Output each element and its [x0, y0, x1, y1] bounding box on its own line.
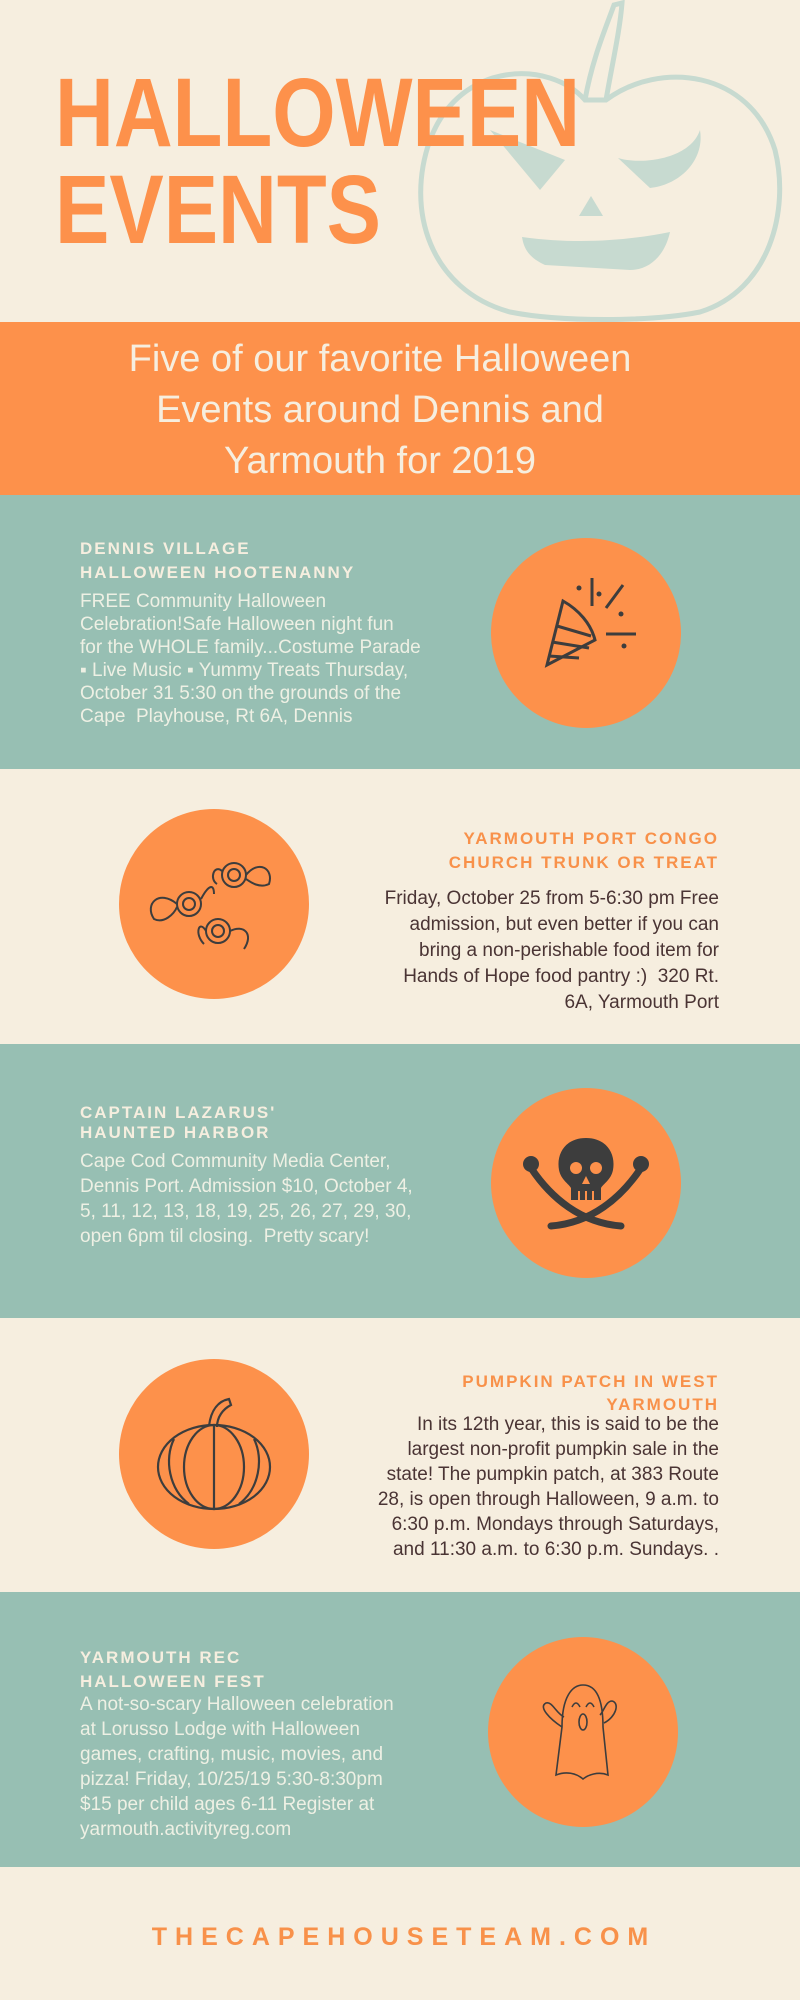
heading: Dennis Village: HALLOWEEN HOOTENANNY — [80, 563, 355, 582]
text: event 4: and 11:30 a.m. to 6:30 p.m. Sundays. . — [393, 1539, 719, 1560]
text: event 3: 5, 11, 12, 13, 18, 19, 25, 26, 27, 29, 30, — [80, 1201, 411, 1222]
icon: ghost — [488, 1637, 678, 1827]
panel: event 3 — [0, 1044, 800, 1318]
text: event 1: FREE Community Halloween — [80, 591, 326, 612]
heading: Pumpkin Patch: PUMPKIN PATCH IN WEST — [462, 1372, 719, 1391]
text: event 4 — [378, 1414, 719, 1560]
text: event 2: Friday, October 25 from 5-6:30 pm Free — [385, 888, 719, 909]
text: event 2: admission, but even better if you can — [410, 914, 719, 935]
text: event 3: open 6pm til closing. Pretty scary! — [80, 1226, 369, 1247]
panel: event 1 — [0, 495, 800, 769]
icon: skull and swords — [491, 1088, 681, 1278]
title — [55, 58, 580, 264]
text: event 4: 6:30 p.m. Mondays through Saturdays, — [392, 1514, 719, 1535]
panel: event 4 — [0, 1318, 800, 1592]
text: event 3: Dennis Port. Admission $10, October 4, — [80, 1176, 413, 1197]
text: event 4: 28, is open through Halloween, 9 a.m. to — [378, 1489, 719, 1510]
banner text: Events around Dennis and — [156, 389, 604, 431]
text: event 4: largest non-profit pumpkin sale in the — [407, 1439, 719, 1460]
orange banner — [0, 322, 800, 495]
heading: Yarmouth Rec — [80, 1648, 266, 1691]
text: event 3: Cape Cod Community Media Center, — [80, 1151, 390, 1172]
heading: Yarmouth Port Congo: CHURCH TRUNK OR TREAT — [449, 853, 719, 872]
text: event 5: $15 per child ages 6-11 Register at — [80, 1794, 374, 1815]
text: event 1: for the WHOLE family...Costume Parade — [80, 637, 421, 658]
panel: event 2 — [0, 769, 800, 1044]
text: event 2: bring a non-perishable food item for — [419, 940, 719, 961]
text: event 4: In its 12th year, this is said to be the — [417, 1414, 719, 1435]
title: EVENTS — [55, 155, 381, 264]
banner text — [129, 338, 631, 482]
heading: Yarmouth Rec: HALLOWEEN FEST — [80, 1672, 266, 1691]
heading: Yarmouth Port Congo — [449, 829, 719, 872]
banner text: Five of our favorite Halloween — [129, 338, 631, 380]
heading: Yarmouth Port Congo: YARMOUTH PORT CONGO — [463, 829, 719, 848]
text: event 1: ▪ Live Music ▪ Yummy Treats Thursday, — [80, 660, 408, 681]
heading: Captain Lazarus — [80, 1103, 276, 1142]
heading: Pumpkin Patch: YARMOUTH — [606, 1395, 719, 1414]
heading: Yarmouth Rec: YARMOUTH REC — [80, 1648, 241, 1667]
text: event 5: pizza! Friday, 10/25/19 5:30-8:30pm — [80, 1769, 383, 1790]
icon: candies — [119, 809, 309, 999]
text: event 3 — [80, 1151, 413, 1247]
text: event 2: Hands of Hope food pantry :) 320 Rt. — [403, 966, 719, 987]
text: event 5: games, crafting, music, movies, and — [80, 1744, 383, 1765]
heading: Dennis Village: DENNIS VILLAGE — [80, 539, 251, 558]
header pumpkin outline — [418, 0, 782, 322]
text: event 5 — [80, 1694, 394, 1840]
text: event 5: A not-so-scary Halloween celebration — [80, 1694, 394, 1715]
heading: Pumpkin Patch — [462, 1372, 719, 1414]
text: event 2 — [385, 888, 719, 1013]
icon: party popper — [491, 538, 681, 728]
heading: Captain Lazarus: CAPTAIN LAZARUS' — [80, 1103, 276, 1122]
heading: Captain Lazarus: HAUNTED HARBOR — [80, 1123, 270, 1142]
title: HALLOWEEN — [55, 58, 580, 167]
text: event 5: yarmouth.activityreg.com — [80, 1819, 291, 1840]
heading: Dennis Village — [80, 539, 355, 582]
icon: pumpkin — [119, 1359, 309, 1549]
text: event 1: Cape Playhouse, Rt 6A, Dennis — [80, 706, 352, 727]
text: event 1: Celebration!Safe Halloween night fun — [80, 614, 394, 635]
text: event 2: 6A, Yarmouth Port — [564, 992, 719, 1013]
text: event 1 — [80, 591, 421, 727]
text: event 4: state! The pumpkin patch, at 383 Route — [387, 1464, 719, 1485]
footer url: THECAPEHOUSETEAM.COM — [152, 1923, 656, 1951]
panel: event 5 — [0, 1592, 800, 1867]
text: event 5: at Lorusso Lodge with Halloween — [80, 1719, 360, 1740]
text: event 1: October 31 5:30 on the grounds of the — [80, 683, 401, 704]
banner text: Yarmouth for 2019 — [224, 440, 536, 482]
